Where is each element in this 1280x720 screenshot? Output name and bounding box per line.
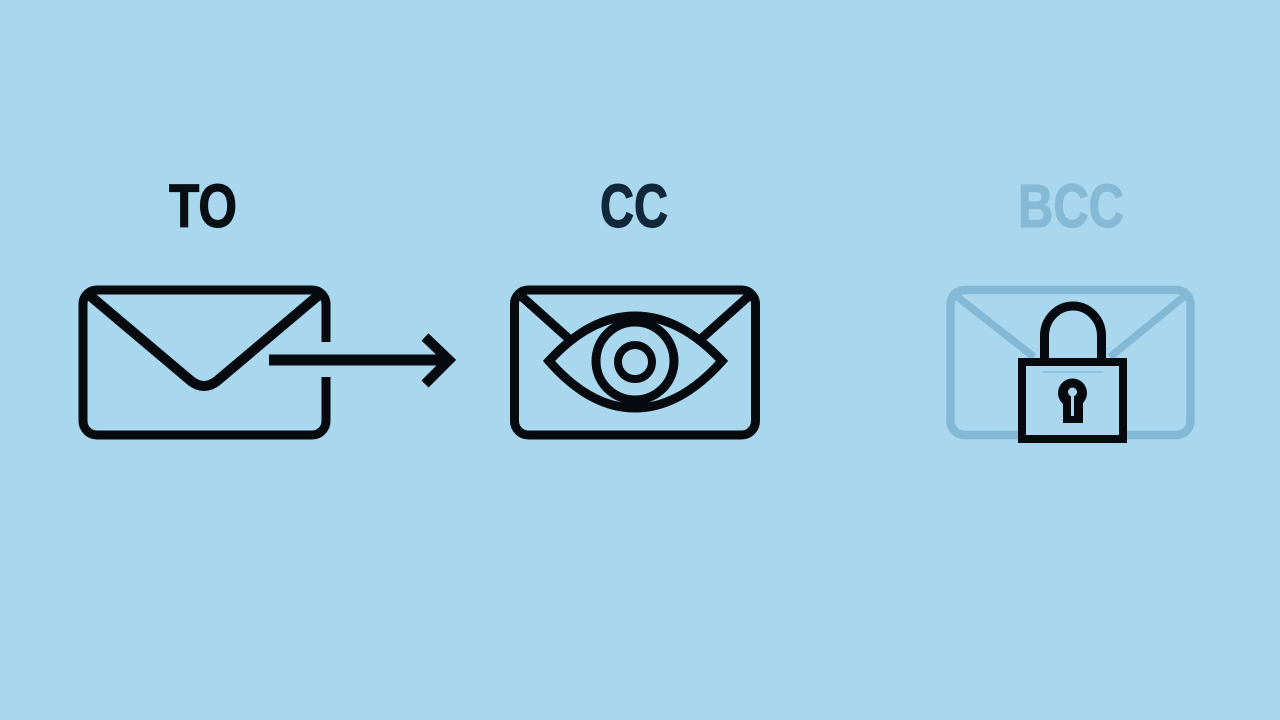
envelope outline with gap — [83, 290, 326, 435]
heading: TO: TO — [169, 172, 237, 240]
heading: BCC: BCC — [1018, 172, 1124, 240]
padlock body — [1022, 362, 1123, 439]
icon: envelope with outgoing arrow — [83, 290, 449, 435]
padlock shackle — [1044, 306, 1102, 360]
faded envelope outline — [950, 290, 1190, 435]
keyhole — [1058, 378, 1087, 423]
icon: faded envelope with padlock — [950, 290, 1190, 439]
pupil — [618, 345, 652, 379]
iris — [596, 322, 674, 400]
eye outline — [549, 316, 722, 408]
envelope flap lines — [520, 295, 750, 338]
icon: envelope with eye — [514, 290, 756, 435]
arrow — [269, 337, 449, 384]
faint flap trace inside padlock — [1043, 371, 1103, 373]
heading: CC: CC — [600, 172, 668, 240]
envelope flap — [88, 294, 320, 386]
envelope outline — [514, 290, 756, 435]
